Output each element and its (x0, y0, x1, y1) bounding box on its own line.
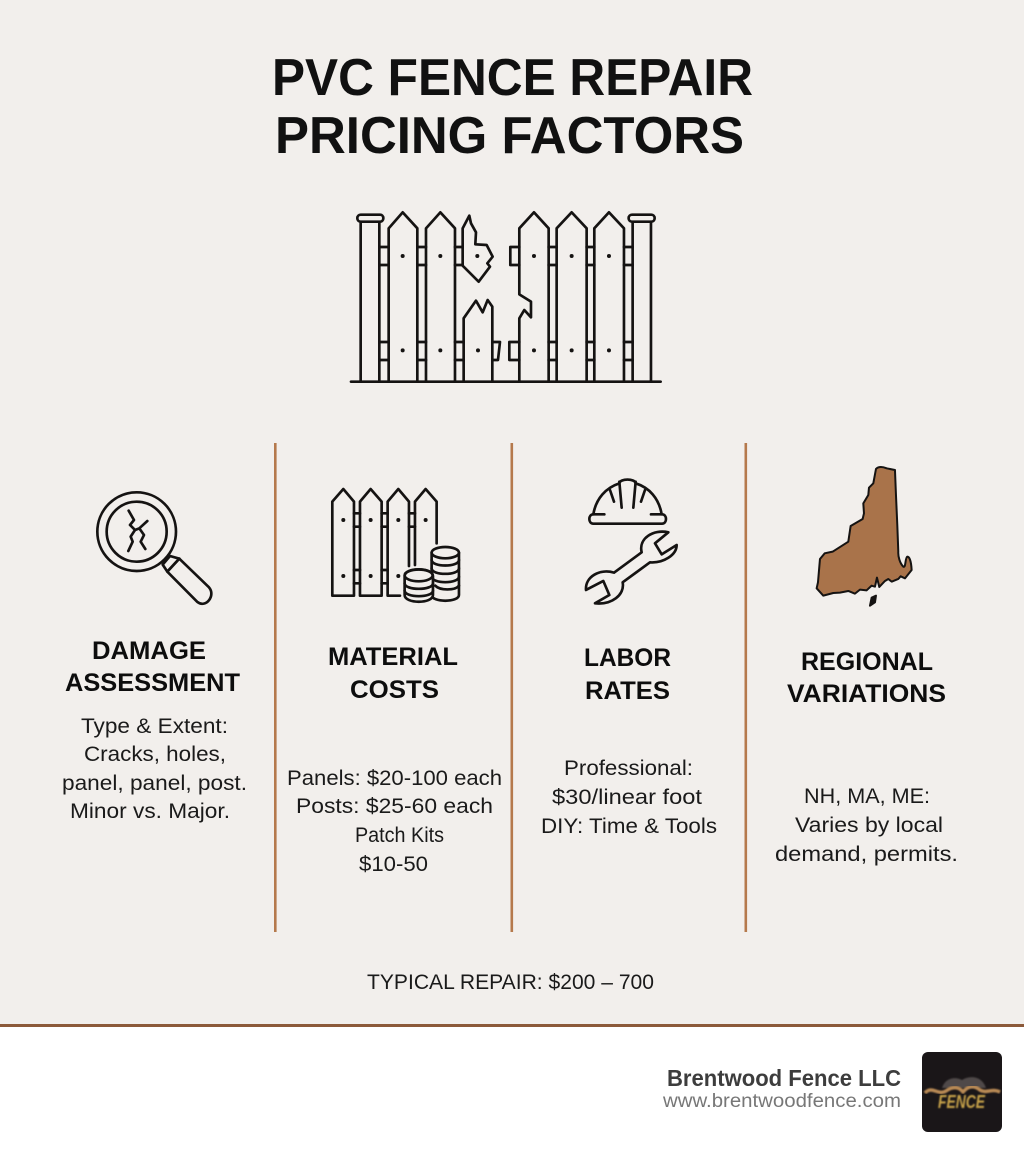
heading: RATES (585, 677, 670, 705)
typical repair callout: TYPICAL REPAIR: $200 – 700 (367, 970, 654, 994)
icon: broken fence (351, 212, 661, 382)
text block: NH, MA, ME: (804, 784, 930, 808)
logo (922, 1052, 1002, 1132)
text block: $10-50 (359, 852, 428, 876)
heading: REGIONAL (801, 648, 933, 676)
website: www.brentwoodfence.com (662, 1091, 901, 1112)
text block: Posts: $25-60 each (296, 794, 493, 818)
text block (541, 756, 717, 838)
logo: FENCE (938, 1092, 986, 1112)
heading (584, 644, 671, 705)
text block: Cracks, holes, (84, 742, 226, 766)
heading: DAMAGE (92, 637, 206, 665)
heading: COSTS (350, 676, 439, 704)
heading: VARIATIONS (787, 680, 946, 708)
text block: Type & Extent: (81, 714, 228, 738)
text block: panel, panel, post. (62, 771, 247, 795)
icon: fence with coins (332, 489, 459, 602)
text block (775, 784, 958, 866)
divider 3 (744, 443, 747, 932)
text block: Professional: (564, 756, 693, 780)
company name: Brentwood Fence LLC (667, 1065, 901, 1091)
text block: Varies by local (795, 813, 943, 837)
heading (328, 643, 458, 704)
panel: labor rates (541, 480, 717, 838)
heading: LABOR (584, 644, 671, 672)
panel: damage assessment (62, 492, 247, 823)
heading (787, 648, 946, 708)
text block: Panels: $20-100 each (287, 766, 502, 790)
text block (287, 766, 502, 876)
panel: regional variations (775, 467, 958, 866)
text block: demand, permits. (775, 842, 958, 866)
text block (62, 714, 247, 823)
text block: Patch Kits (355, 823, 444, 847)
icon: magnifying glass with crack (97, 492, 211, 604)
icon: hard hat and wrench (586, 480, 677, 604)
title (272, 49, 753, 165)
panel: material costs (287, 489, 502, 876)
title: PRICING FACTORS (275, 107, 744, 165)
text block: Minor vs. Major. (70, 799, 230, 823)
footer (0, 1024, 1024, 1154)
divider 1 (274, 443, 277, 932)
heading: ASSESSMENT (65, 669, 240, 697)
heading: MATERIAL (328, 643, 458, 671)
text block: DIY: Time & Tools (541, 814, 717, 838)
heading (65, 637, 240, 697)
divider 2 (510, 443, 513, 932)
icon: New Hampshire map (817, 467, 912, 606)
text block: $30/linear foot (552, 785, 702, 809)
title: PVC FENCE REPAIR (272, 49, 753, 107)
